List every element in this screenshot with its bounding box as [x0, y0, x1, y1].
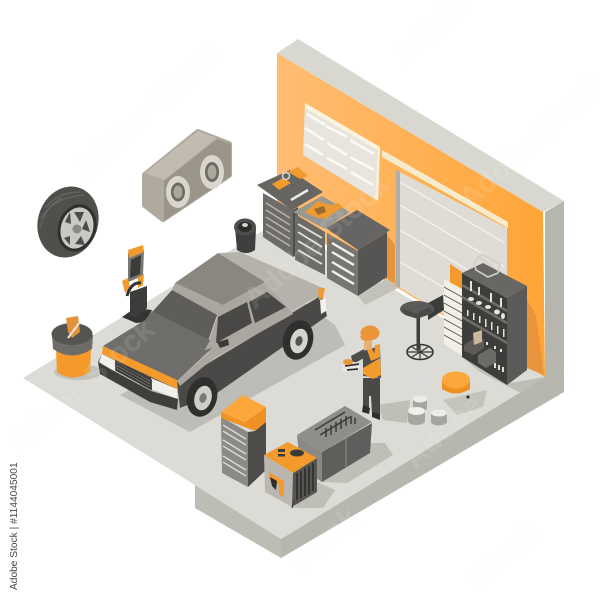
back wall [277, 39, 564, 378]
orange-top cabinet [221, 395, 266, 487]
car [98, 252, 345, 432]
windshield [145, 290, 217, 350]
cabin pillars [172, 282, 290, 352]
stock watermark: Adobe Stock [238, 168, 396, 315]
rear deck [218, 252, 323, 312]
shelf contents [467, 281, 505, 352]
orange round stool [442, 372, 487, 415]
bucket with tools [52, 316, 102, 380]
stacks of wheel discs [408, 396, 447, 426]
stock watermark: Adobe [398, 388, 489, 475]
diagnostic stand [122, 245, 152, 323]
car body side [177, 295, 327, 408]
front fascia [98, 354, 178, 399]
workbench [297, 406, 372, 482]
car shadow [120, 300, 345, 432]
generator shadow [293, 482, 335, 508]
white drawer unit [444, 264, 462, 356]
tool cabinet 2 [293, 196, 350, 275]
headlight left [99, 354, 116, 372]
stool [400, 295, 444, 360]
tool cabinet 3 [326, 210, 390, 296]
stock watermark: Stock [463, 516, 546, 595]
tail light [318, 288, 325, 300]
roof [175, 253, 265, 305]
brake disc block [145, 131, 231, 221]
trash can [234, 218, 256, 253]
cabinet shadow [358, 278, 398, 305]
pegboard panel [303, 103, 380, 201]
tool cabinet 1 [257, 167, 323, 257]
stock id caption: Adobe Stock | #1144045001 [9, 462, 20, 590]
floor slab [23, 222, 564, 558]
orange hood stripe [102, 346, 177, 389]
mirror [217, 339, 229, 348]
stock watermark: Stock [283, 501, 366, 580]
hood [103, 320, 212, 381]
tire [28, 178, 108, 266]
side windows [216, 302, 252, 343]
rear wheel [278, 317, 318, 363]
bench shadow [320, 443, 393, 483]
worker shadow [378, 400, 410, 423]
parts shelf [462, 254, 527, 385]
headlight right [151, 378, 178, 399]
bumper [98, 362, 178, 410]
toolbox on shelf [474, 254, 500, 277]
beltline stripe [177, 310, 293, 386]
grille [116, 361, 151, 389]
front wheel [182, 374, 222, 420]
stock watermark: Adobe Stock [68, 38, 226, 185]
roller door [382, 150, 508, 352]
portable generator [264, 442, 317, 508]
stock watermark: Adobe Stock [3, 313, 161, 460]
worker [341, 326, 381, 420]
